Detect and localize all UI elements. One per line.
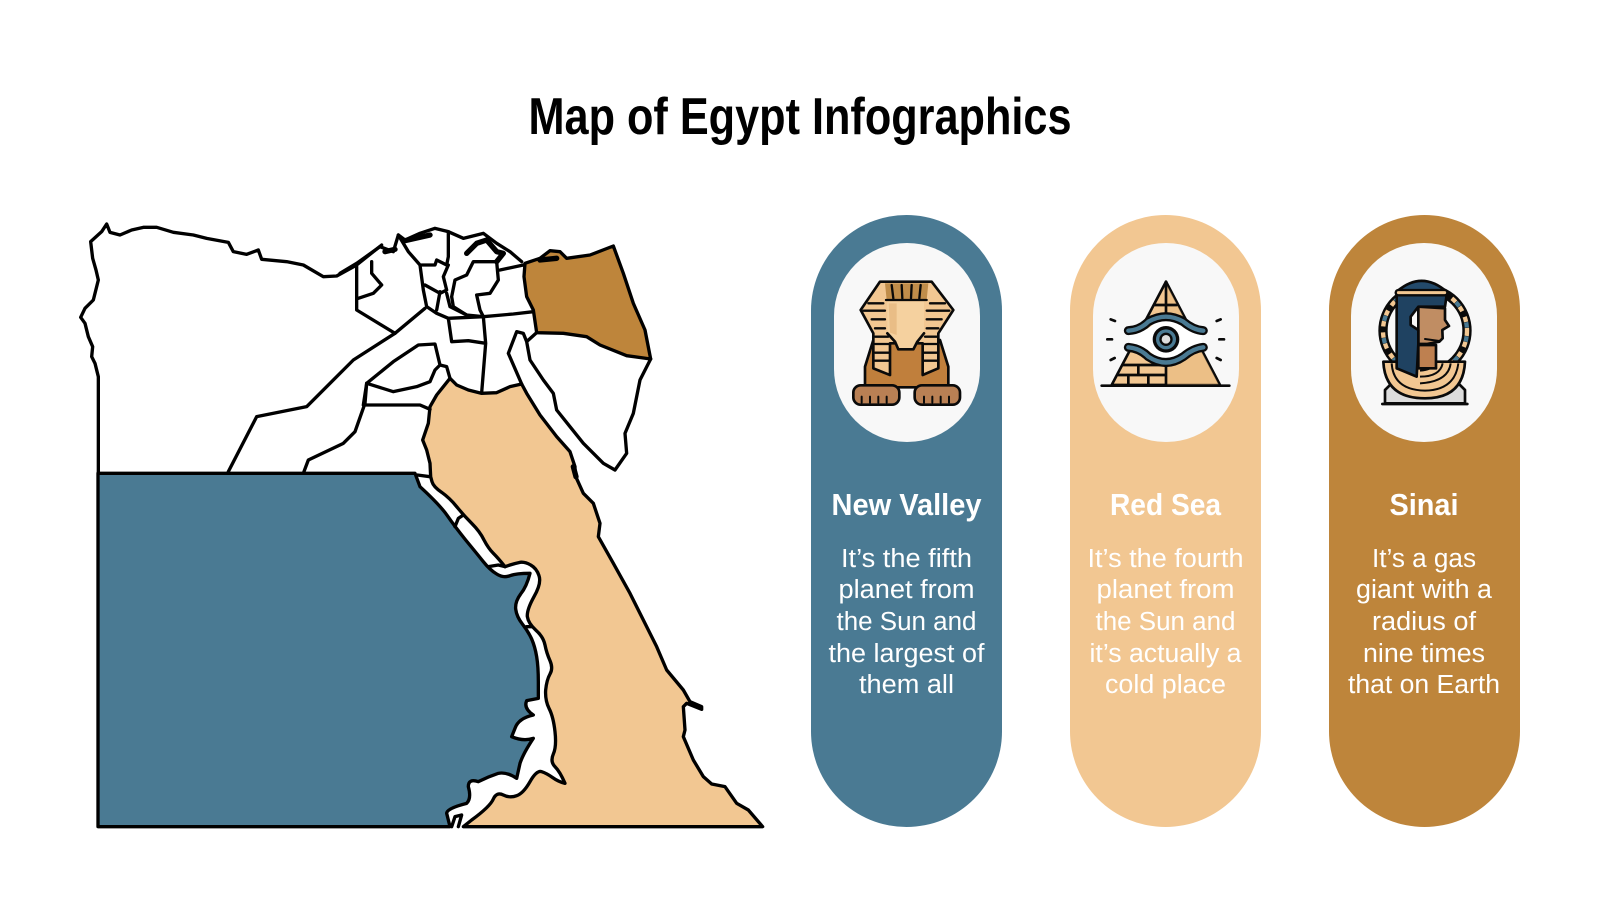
pill background — [811, 215, 1002, 827]
description: planet from — [1096, 576, 1234, 604]
heading: New Valley — [832, 487, 982, 522]
description — [828, 545, 985, 699]
description: the Sun and — [836, 608, 976, 636]
western borders and coast — [81, 224, 395, 473]
description: It’s the fourth — [1088, 545, 1244, 573]
heading: Sinai — [1390, 487, 1458, 522]
icon circle — [834, 243, 980, 442]
region: Red Sea (peach) — [423, 378, 763, 827]
description: that on Earth — [1348, 671, 1500, 699]
description: cold place — [1105, 671, 1226, 699]
description: It’s the fifth — [841, 545, 972, 573]
icon: pharaoh portrait — [1382, 281, 1467, 404]
icon: sphinx — [853, 282, 960, 405]
description: radius of — [1372, 608, 1477, 636]
pill background — [1070, 215, 1261, 827]
description: giant with a — [1356, 576, 1493, 604]
description — [1088, 545, 1244, 699]
description: the largest of — [828, 640, 985, 668]
panel: Red Sea — [1070, 215, 1261, 827]
description: planet from — [838, 576, 974, 604]
region: New Valley (blue) — [98, 473, 538, 827]
icon circle — [1351, 243, 1497, 442]
icon circle — [1093, 243, 1239, 442]
pill background — [1329, 215, 1520, 827]
description: It’s a gas — [1372, 545, 1476, 573]
panel: Sinai — [1329, 215, 1520, 827]
description: nine times — [1363, 640, 1485, 668]
heading: Red Sea — [1110, 487, 1222, 522]
icon: eye of Horus on pyramid — [1102, 282, 1229, 386]
panel: New Valley — [811, 215, 1002, 827]
description: the Sun and — [1096, 608, 1236, 636]
title: Map of Egypt Infographics — [528, 88, 1072, 146]
description: them all — [859, 671, 954, 699]
delta and Sinai borders — [340, 228, 651, 477]
map of Egypt — [81, 224, 763, 827]
description: it’s actually a — [1090, 640, 1242, 668]
description — [1348, 545, 1500, 699]
region: North Sinai (brown) — [524, 246, 651, 359]
